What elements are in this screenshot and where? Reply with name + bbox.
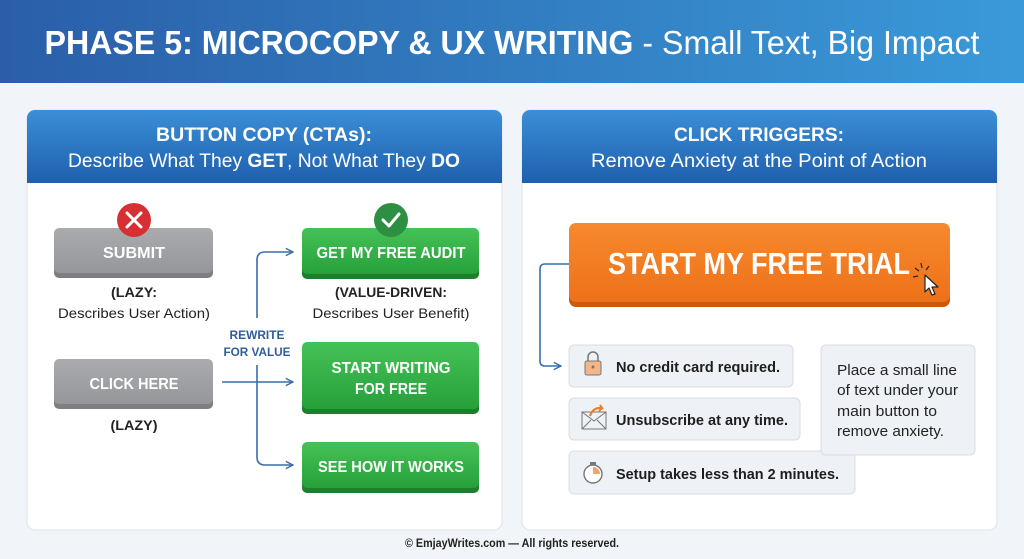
button: submit xyxy=(54,228,213,278)
caption: lazy describes user action xyxy=(58,284,210,321)
note box: Place a small line xyxy=(837,362,957,379)
button: get my free audit: GET MY FREE AUDIT xyxy=(316,245,466,262)
arrow: connector xyxy=(540,264,569,366)
icon: envelope xyxy=(582,405,606,429)
icon: lock xyxy=(585,352,601,375)
title bar xyxy=(0,0,1024,83)
icon: stopwatch xyxy=(584,462,602,483)
caption: lazy describes user action: Describes User Action) xyxy=(58,305,210,321)
button: start my free trial xyxy=(569,223,950,307)
footer: © EmjayWrites.com — All rights reserved. xyxy=(405,536,619,550)
button: start writing for free xyxy=(302,342,479,414)
pill: setup time: Setup takes less than 2 minutes. xyxy=(616,466,839,483)
heading: click triggers: CLICK TRIGGERS: xyxy=(674,125,844,146)
button: see how it works xyxy=(302,442,479,493)
pill: no credit card: No credit card required. xyxy=(616,359,780,376)
button: submit: SUBMIT xyxy=(103,245,165,262)
button: click here: CLICK HERE xyxy=(90,376,179,393)
button: start my free trial: START MY FREE TRIAL xyxy=(608,246,910,281)
caption: value-driven xyxy=(312,284,470,321)
caption: value-driven: Describes User Benefit) xyxy=(312,305,470,321)
note box xyxy=(821,345,975,455)
button: get my free audit xyxy=(302,228,479,279)
heading: button copy: Describe What They GET, Not What They DO xyxy=(68,151,460,172)
panel: click triggers xyxy=(522,110,997,530)
heading: click triggers xyxy=(591,125,927,172)
label: rewrite for value xyxy=(224,328,290,359)
note box: remove anxiety. xyxy=(837,423,944,440)
heading: button copy: BUTTON COPY (CTAs): xyxy=(156,125,372,146)
icon: red x xyxy=(117,203,151,237)
heading: click triggers: Remove Anxiety at the Point of Action xyxy=(591,151,927,172)
button: click here xyxy=(54,359,213,409)
caption: lazy: (LAZY) xyxy=(110,417,158,433)
icon: cursor xyxy=(913,263,938,295)
note box: of text under your xyxy=(837,382,958,399)
title bar: PHASE 5: MICROCOPY & UX WRITING - Small Text, Big Impact xyxy=(44,24,979,61)
caption: value-driven: (VALUE-DRIVEN: xyxy=(335,284,447,300)
pill: unsubscribe xyxy=(569,398,800,440)
button: start writing for free: START WRITING xyxy=(332,360,450,377)
pill: unsubscribe: Unsubscribe at any time. xyxy=(616,412,788,429)
caption: lazy describes user action: (LAZY: xyxy=(111,284,157,300)
label: rewrite for value: REWRITE xyxy=(230,328,284,342)
icon: green check xyxy=(374,203,408,237)
panel: button copy xyxy=(27,110,502,530)
label: rewrite for value: FOR VALUE xyxy=(224,345,290,359)
button: start writing for free: FOR FREE xyxy=(355,381,427,398)
note box: main button to xyxy=(837,403,937,420)
arrows: rewrite xyxy=(222,252,293,465)
heading: button copy xyxy=(68,125,460,172)
pill: setup time xyxy=(569,451,855,494)
button: see how it works: SEE HOW IT WORKS xyxy=(318,459,464,476)
pill: no credit card xyxy=(569,345,793,387)
